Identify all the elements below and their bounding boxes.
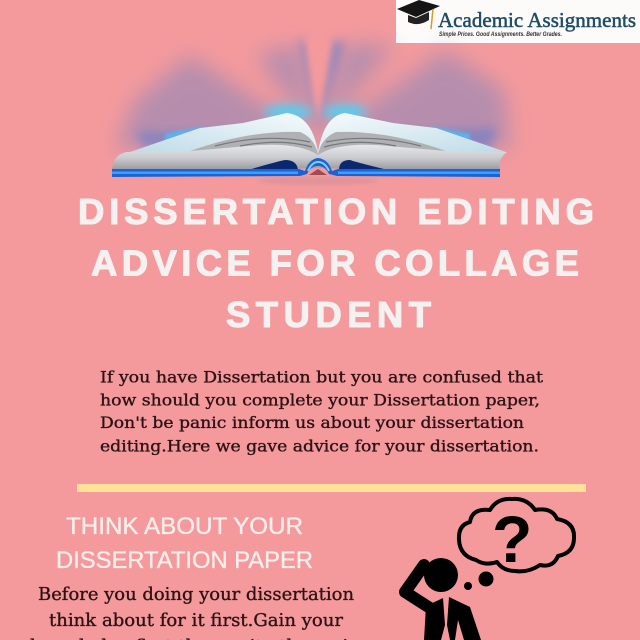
- striped page edges: [190, 132, 318, 155]
- top pages: [130, 113, 318, 152]
- page block: [112, 142, 507, 169]
- thought cloud: [459, 499, 574, 571]
- spine hump dark: [309, 169, 327, 175]
- title: [78, 191, 594, 335]
- title: DISSERTATION EDITING: [78, 191, 594, 232]
- intro text block: If you have Dissertation but you are confused that: [100, 368, 544, 386]
- illustration: open book with light rays: [112, 36, 510, 185]
- book reflection: [258, 177, 378, 185]
- centre pink ray: [306, 36, 330, 125]
- intro text block: how should you complete your Dissertation paper,: [100, 392, 540, 410]
- section heading: [56, 513, 313, 574]
- section heading: DISSERTATION PAPER: [56, 547, 313, 574]
- icon: confused person with thought bubble: [405, 499, 574, 640]
- question mark: ?: [492, 502, 532, 576]
- intro text block: editing.Here we gave advice for your dissertation.: [100, 438, 539, 456]
- logo name: Academic Assignments: [438, 8, 636, 32]
- section paragraph: Before you doing your dissertation: [38, 584, 354, 605]
- title: ADVICE FOR COLLAGE: [91, 242, 579, 284]
- thought dots: [478, 572, 494, 586]
- head: [424, 558, 458, 592]
- section paragraph: [30, 584, 360, 640]
- book inner cover shadows: [248, 160, 298, 170]
- logo tagline: Simple Prices. Good Assignments. Better Grades.: [439, 31, 562, 38]
- section paragraph: think about for it first.Gain your: [49, 610, 343, 631]
- yellow divider bar: [77, 484, 586, 492]
- torso: [424, 598, 445, 640]
- intro text block: Don't be panic inform us about your dissertation: [100, 414, 524, 432]
- title: STUDENT: [226, 294, 431, 335]
- section heading: THINK ABOUT YOUR: [66, 513, 303, 540]
- arm: [405, 565, 430, 608]
- logo: Academic Assignments: [396, 0, 640, 43]
- intro text block: [100, 368, 544, 456]
- light rays: [115, 36, 510, 150]
- blue cover strip: [112, 158, 500, 177]
- icon: graduation cap: [397, 0, 440, 29]
